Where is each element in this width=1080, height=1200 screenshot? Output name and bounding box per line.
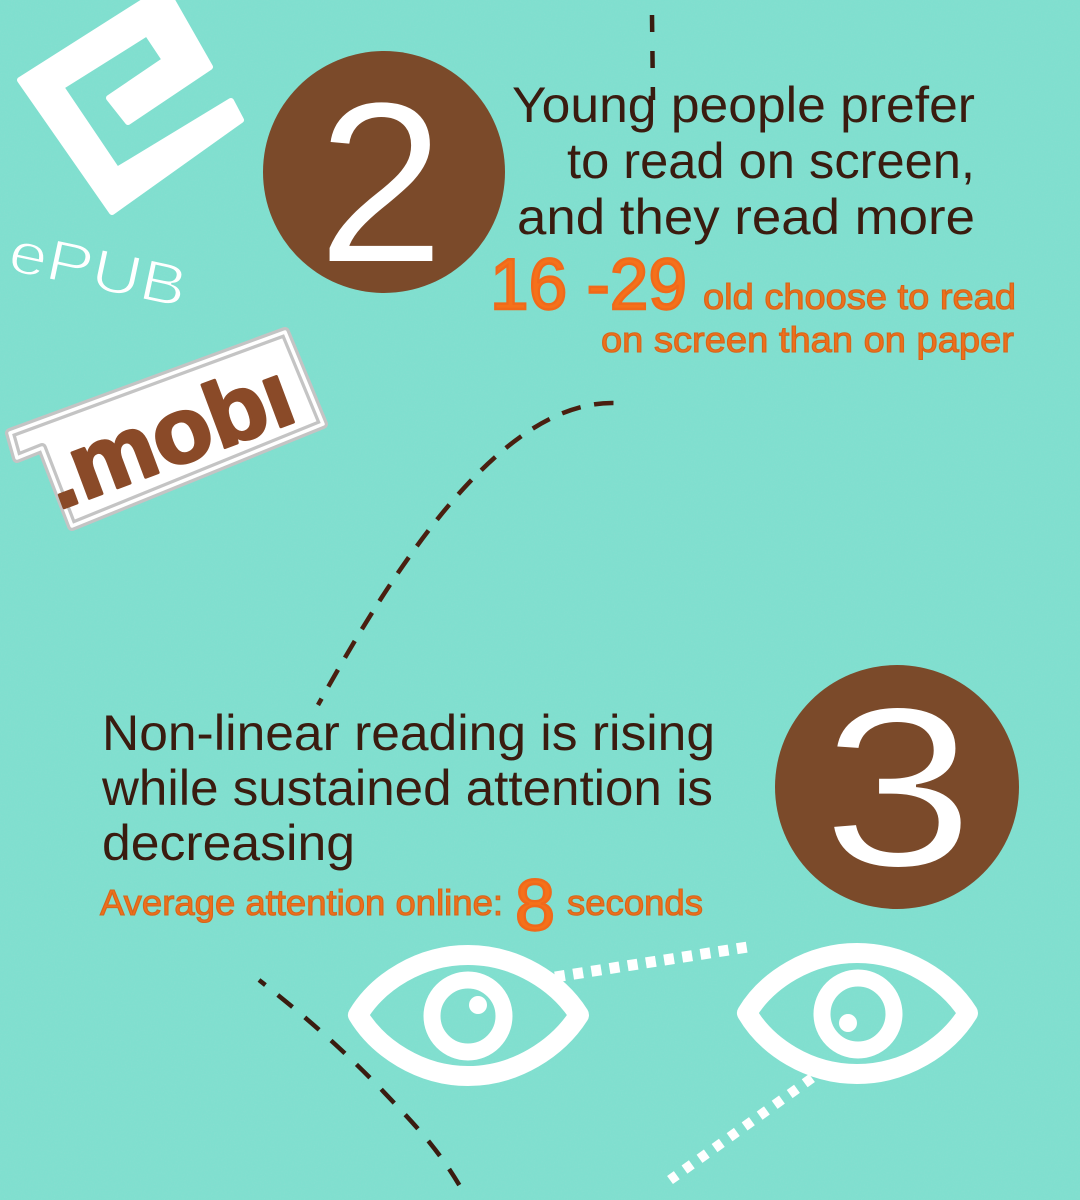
callout: ages 16-29: old choose to read <box>703 276 1016 317</box>
text block: young people: to read on screen, <box>567 133 975 189</box>
text block: young people: Young people prefer <box>512 77 975 133</box>
number 2 badge <box>263 51 505 311</box>
callout: average attention: 8 <box>515 866 555 946</box>
text block: non-linear reading <box>101 705 715 871</box>
text block: young people <box>512 77 975 245</box>
number 3 badge <box>775 660 1019 915</box>
dashed curve: middle <box>318 403 615 705</box>
callout: average attention: seconds <box>567 882 703 923</box>
text block: non-linear reading: while sustained attention is <box>101 760 713 816</box>
callout: ages 16-29: 16 -29 <box>490 245 687 325</box>
dashed path: bottom <box>259 980 465 1195</box>
icon: ePUB logo <box>20 0 241 212</box>
text block: non-linear reading: decreasing <box>102 815 355 871</box>
callout: average attention <box>100 866 703 946</box>
number 3 badge: 3 <box>822 660 974 915</box>
number 2 badge: 2 <box>317 54 445 311</box>
gaze line: lower <box>670 1078 812 1180</box>
icon: .mobi tag: .mobı <box>29 343 307 529</box>
callout: ages 16-29 <box>490 245 1016 360</box>
callout: ages 16-29: on screen than on paper <box>601 319 1014 360</box>
icon: right eye <box>747 953 968 1074</box>
text block: non-linear reading: Non-linear reading is rising <box>102 705 715 761</box>
ePUB label: ePUB <box>3 219 193 320</box>
icon: left eye <box>358 955 579 1076</box>
text block: young people: and they read more <box>517 189 975 245</box>
gaze line: between eyes <box>555 947 748 977</box>
callout: average attention: Average attention online: <box>100 882 503 923</box>
dashed path: top <box>652 15 653 100</box>
